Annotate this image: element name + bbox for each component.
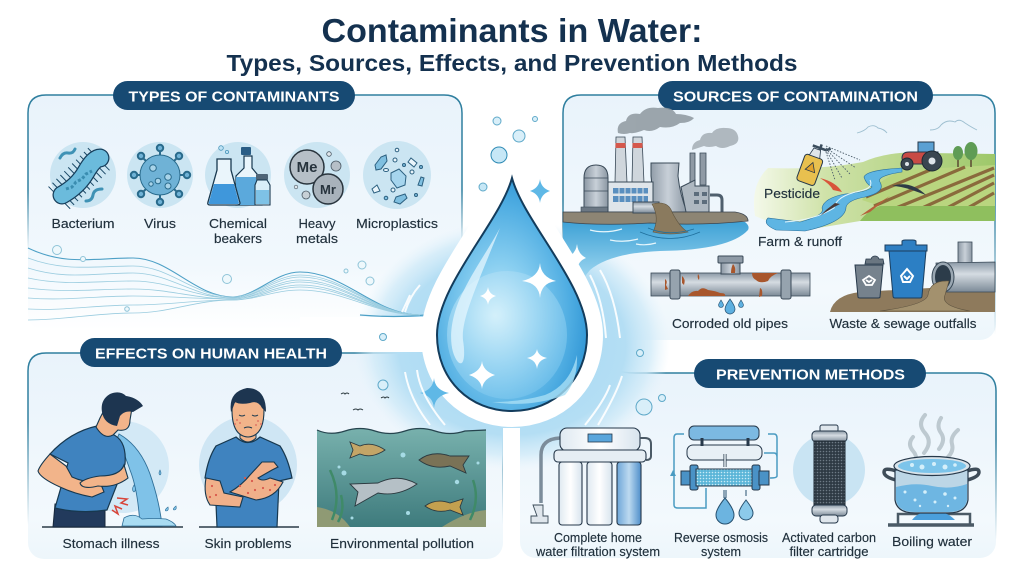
header: effects on human health: [80, 338, 342, 367]
label: Activated carbon: [782, 530, 876, 545]
right factory: [681, 180, 709, 212]
title: [226, 12, 798, 76]
header: types of contaminants: TYPES OF CONTAMINANTS: [128, 90, 340, 106]
tank: [584, 165, 608, 209]
illustration: boiling water: [884, 415, 979, 549]
types labels: Chemical: [209, 216, 267, 231]
inner highlight: [451, 228, 500, 363]
header: prevention methods: [694, 359, 926, 388]
trees: [958, 155, 971, 167]
illustration: waste and sewage: [830, 240, 995, 331]
runoff arrows: [820, 178, 842, 192]
water tank: [317, 428, 486, 527]
label: Boiling water: [892, 534, 973, 549]
sparkles and bubbles around the drop: [378, 116, 666, 425]
tractor: [901, 142, 942, 171]
smoke: [618, 108, 738, 150]
icon: heavy metals: Mr: [320, 182, 336, 197]
illustration: carbon cartridge: [782, 425, 876, 559]
wave lines: [28, 248, 420, 320]
water: [563, 222, 749, 285]
pot rim: [894, 456, 970, 476]
header: types of contaminants: [113, 81, 355, 110]
icon: heavy metals: Me: [297, 159, 317, 176]
header: effects on human health: EFFECTS ON HUMAN HEALTH: [95, 346, 327, 362]
vomit stream: [117, 434, 162, 526]
illustration: home water filter: water filtration system: [535, 544, 660, 559]
chimneys: [615, 137, 644, 183]
pot body: [895, 470, 968, 513]
illustration: carbon cartridge: filter cartridge: [790, 544, 868, 559]
drop glow: [300, 220, 670, 572]
hills: [754, 152, 995, 231]
steam: [910, 415, 958, 463]
main building: [608, 182, 653, 212]
types labels: Heavy: [298, 216, 336, 231]
icon: microplastics: [363, 141, 431, 209]
illustration: environmental pollution: [317, 393, 486, 551]
outfall: [633, 202, 659, 213]
furrows: [866, 167, 994, 209]
illustration: stomach illness: [38, 392, 183, 551]
birds: [341, 393, 389, 410]
label: Stomach illness: [62, 536, 160, 551]
top housing: [560, 428, 640, 451]
header: sources of contamination: SOURCES OF CONTAMINATION: [673, 90, 918, 106]
illustration: farm and runoff: [754, 120, 995, 249]
shirt: [50, 426, 125, 512]
illustration: skin problems: [199, 388, 299, 551]
seabed: [317, 507, 486, 527]
waste label: Waste & sewage outfalls: [830, 316, 977, 331]
illustration: reverse osmosis: [670, 426, 777, 559]
burner: [898, 514, 970, 525]
types labels: [52, 216, 439, 246]
panel: sources of contamination: [563, 95, 996, 340]
fish: [350, 442, 469, 515]
shirt: [205, 437, 292, 527]
neck and head: [240, 428, 256, 442]
inner lens: [447, 271, 567, 399]
handles: [884, 469, 979, 480]
pants: [53, 504, 105, 527]
icon: heavy metals: [284, 142, 350, 208]
icon: chemical beakers: [205, 142, 271, 208]
header: sources of contamination: [658, 81, 933, 110]
farm label: Farm & runoff: [758, 234, 842, 249]
drop body: [437, 178, 587, 411]
water drop: [437, 178, 587, 411]
wave bubbles: [52, 246, 374, 311]
label: Complete home: [554, 530, 642, 545]
sparkles: [469, 263, 556, 389]
pesticide label: Pesticide: [764, 186, 820, 201]
halo: [437, 178, 587, 411]
tube and faucet: [541, 438, 560, 503]
seaweed: [330, 470, 476, 522]
types labels: Bacterium: [52, 216, 114, 231]
panel: types of contaminants: [28, 95, 462, 330]
types labels: Microplastics: [356, 216, 439, 231]
types labels: beakers: [214, 231, 263, 246]
field: [862, 165, 995, 206]
river: [766, 168, 902, 231]
illustration: home water filter: [531, 428, 660, 559]
types labels: Virus: [144, 216, 177, 231]
header: prevention methods: PREVENTION METHODS: [716, 368, 905, 384]
white arcs: [402, 270, 622, 425]
canisters: [559, 462, 582, 525]
label: Skin problems: [204, 536, 292, 551]
mount bar: [554, 450, 646, 462]
pesticide bottle: [796, 140, 831, 187]
label: Environmental pollution: [330, 536, 474, 551]
illustration: corroded pipes: [651, 256, 810, 331]
ground: [563, 212, 748, 224]
clouds: [857, 120, 977, 133]
arm: [38, 454, 104, 497]
pipes label: Corroded old pipes: [672, 316, 789, 331]
types labels: metals: [296, 231, 339, 246]
neck and head: [96, 395, 132, 436]
panel: prevention methods: [520, 360, 996, 558]
label: Reverse osmosis: [674, 530, 768, 545]
title: Contaminants in Water:: [322, 12, 702, 49]
panel: effects on human health: [28, 353, 503, 559]
pain marks: [112, 498, 128, 514]
title: Types, Sources, Effects, and Prevention Methods: [226, 50, 798, 76]
spray: [826, 146, 860, 180]
illustration: factory: [563, 108, 749, 285]
icon: virus: [127, 142, 193, 208]
arms: [205, 478, 243, 507]
cooling tower: [649, 163, 687, 212]
loops: [674, 434, 777, 508]
icon: bacterium: [50, 142, 116, 208]
illustration: reverse osmosis: system: [701, 544, 741, 559]
